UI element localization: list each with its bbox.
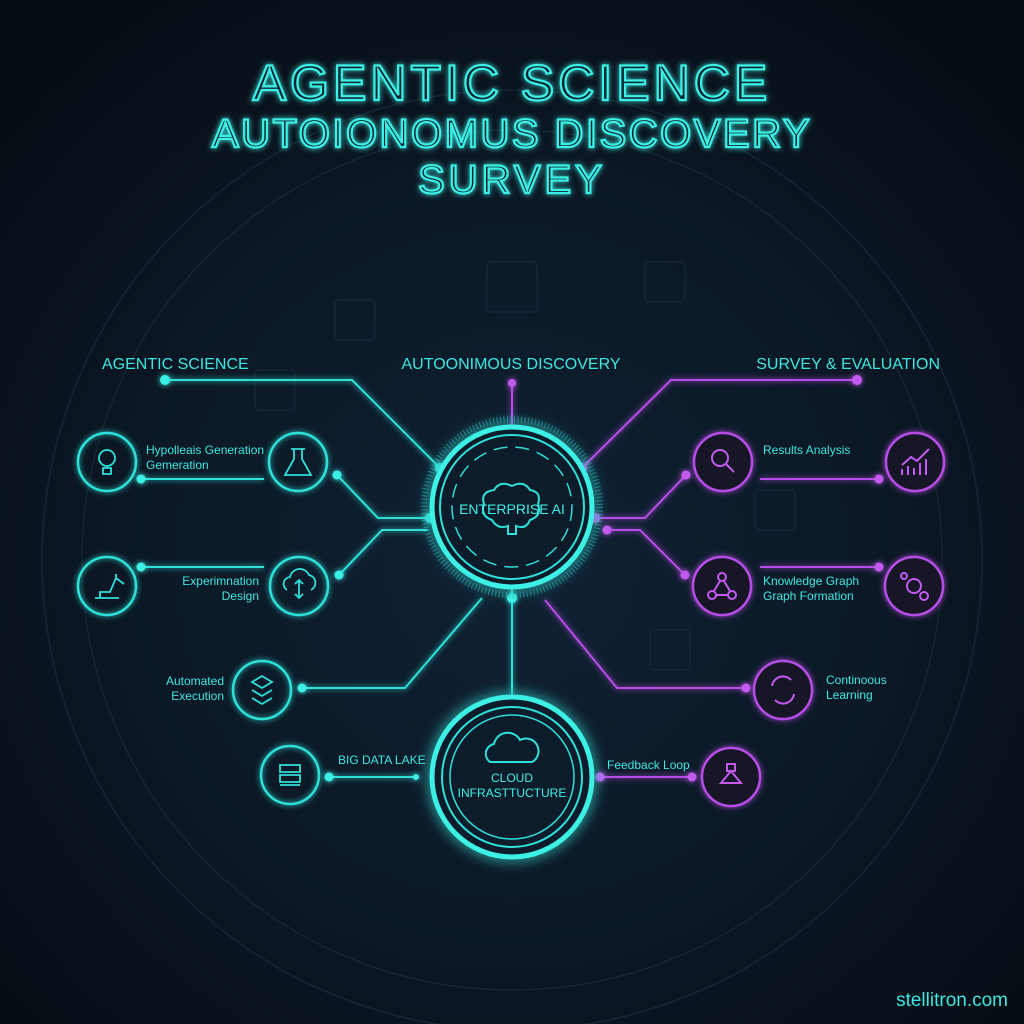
label: results analysis: Results Analysis <box>763 443 850 457</box>
icon: chart <box>902 449 929 475</box>
icons magenta <box>693 433 944 806</box>
icon: layers <box>252 676 272 704</box>
connector lines magenta <box>512 380 879 777</box>
heading: autonomous discovery: AUTOONIMOUS DISCOVERY <box>402 356 621 373</box>
connector lines cyan <box>141 380 512 777</box>
hub: cloud infrastructure: CLOUD <box>491 771 533 785</box>
icon: cloud updown <box>284 569 315 598</box>
heading: agentic science: AGENTIC SCIENCE <box>102 356 249 373</box>
icon: cycle <box>772 676 794 704</box>
icon: graph <box>708 573 736 599</box>
icon: data stack <box>280 765 300 785</box>
label: hypothesis: Gemeration <box>146 458 209 472</box>
hub: cloud infrastructure <box>432 697 592 857</box>
title <box>212 55 812 202</box>
label: hypothesis: Hypolleais Generation <box>146 443 264 457</box>
label: automated execution: Execution <box>171 689 224 703</box>
label: knowledge graph: Graph Formation <box>763 589 854 603</box>
hub: enterprise AI: ENTERPRISE AI <box>459 501 565 517</box>
icon: flask <box>285 449 311 475</box>
label: continuous learning: Learning <box>826 688 873 702</box>
label: experimentation design: Design <box>222 589 259 603</box>
hub: cloud infrastructure: INFRASTTUCTURE <box>458 786 566 800</box>
label: continuous learning: Continoous <box>826 673 887 687</box>
text labels <box>146 443 887 772</box>
label: feedback loop: Feedback Loop <box>607 758 690 772</box>
watermark: stellitron.com <box>896 990 1008 1011</box>
label: big data lake: BIG DATA LAKE <box>338 753 426 767</box>
icon: magnifier <box>712 450 734 472</box>
label: knowledge graph: Knowledge Graph <box>763 574 859 588</box>
icon: bulb <box>99 450 115 474</box>
heading: survey & evaluation: SURVEY & EVALUATION <box>756 356 940 373</box>
icon: robot arm <box>95 574 124 598</box>
label: experimentation design: Experimnation <box>182 574 259 588</box>
title: AUTOIONOMUS DISCOVERY <box>212 112 812 156</box>
title: SURVEY <box>418 158 606 202</box>
icon: gears <box>901 573 928 600</box>
icon: brain <box>483 484 539 534</box>
icons cyan <box>78 433 328 804</box>
icon: cloud <box>486 733 539 762</box>
icon: feedback <box>721 764 741 783</box>
title: AGENTIC SCIENCE <box>253 55 771 111</box>
label: automated execution: Automated <box>166 674 224 688</box>
hub: enterprise AI <box>424 419 600 595</box>
